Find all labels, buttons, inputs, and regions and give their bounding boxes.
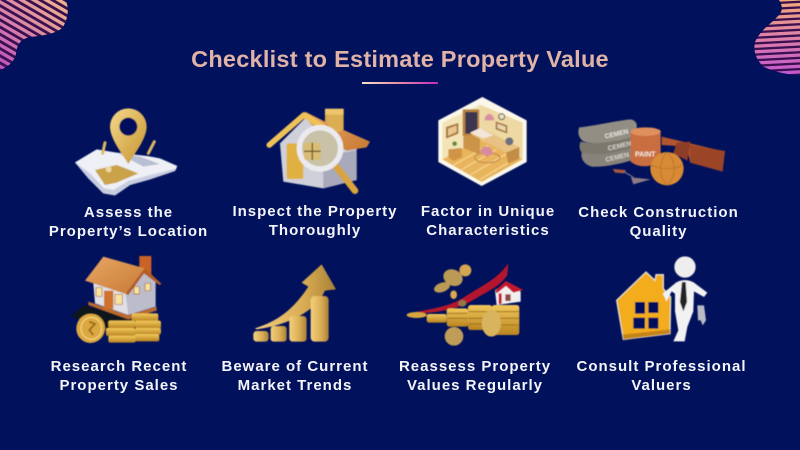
decorative blob: top right — [754, 0, 800, 75]
label: Check Construction Quality: Check Construction — [578, 204, 739, 221]
icon: cement bags, paint and bricks: CEMEN — [605, 152, 630, 164]
icon: businessman leaning on house — [617, 256, 707, 341]
icon: isometric room hexagon — [438, 97, 527, 186]
label: Research Recent Property Sales: Property Sales — [59, 377, 179, 394]
icon: coin stacks with red growth arrow and house — [407, 263, 523, 346]
title underline — [362, 82, 438, 84]
label: Factor in Unique Characteristics: Factor in Unique — [421, 203, 555, 220]
icon: cement bags, paint and bricks — [578, 119, 725, 185]
icon: house with magnifier — [269, 109, 370, 191]
label: Assess the Property's Location: Assess the — [84, 204, 173, 221]
icon: cement bags, paint and bricks: CEMEN — [604, 128, 629, 141]
label: Assess the Property's Location: Property’s Location — [49, 223, 208, 240]
label: Beware of Current Market Trends: Market Trends — [238, 377, 352, 394]
title: Checklist to Estimate Property Value — [191, 46, 609, 72]
label: Research Recent Property Sales: Research Recent — [51, 358, 187, 375]
label: Beware of Current Market Trends: Beware of Current — [221, 358, 369, 375]
label: Inspect the Property Thoroughly: Thoroughly — [269, 222, 361, 239]
label: Reassess Property Values Regularly: Reassess Property — [399, 358, 551, 375]
icon: cement bags, paint and bricks: PAINT — [635, 152, 656, 159]
icon: map with location pin — [75, 108, 177, 195]
icon: house on gold coins — [72, 256, 162, 347]
label: Check Construction Quality: Quality — [630, 223, 687, 240]
decorative blob: top left — [0, 0, 68, 70]
icon: cement bags, paint and bricks: CEMEN — [607, 140, 632, 153]
label: Inspect the Property Thoroughly: Inspect the Property — [232, 203, 398, 220]
label: Reassess Property Values Regularly: Values Regularly — [407, 377, 543, 394]
label: Consult Professional Valuers: Consult Professional — [576, 358, 747, 375]
icon: rising bars and arrow — [253, 264, 336, 342]
label: Consult Professional Valuers: Valuers — [631, 377, 692, 394]
label: Factor in Unique Characteristics: Characteristics — [426, 222, 550, 239]
